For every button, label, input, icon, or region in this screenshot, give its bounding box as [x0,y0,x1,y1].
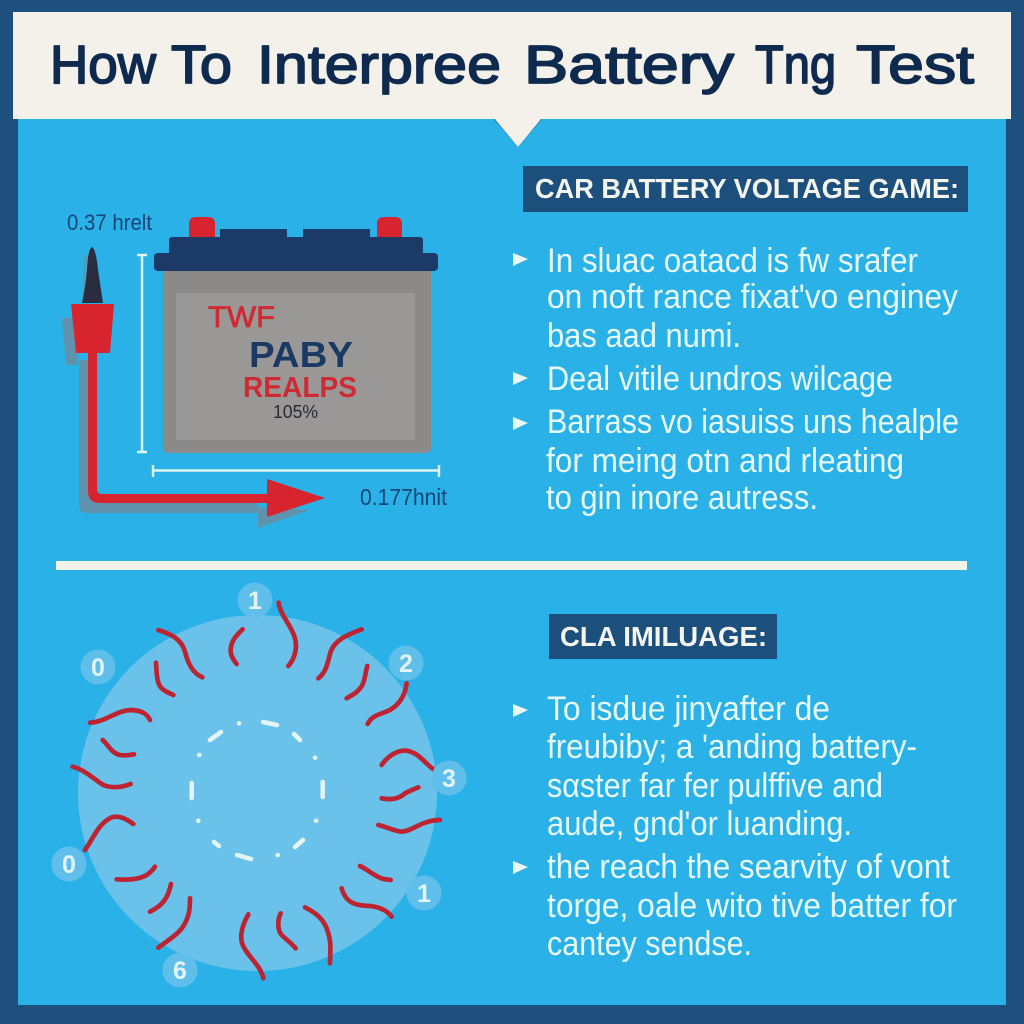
light disc [78,615,437,971]
voltage label bottom: 0.177hnit [360,484,448,510]
probe collar [71,304,114,353]
red squiggles [73,603,440,978]
title text: How [50,35,157,95]
number badges: 3 [442,765,456,793]
heading bar: voltage [523,166,968,212]
battery diagram [62,210,448,528]
number badges: 6 [173,957,187,985]
title text [50,35,974,95]
number badges: 0 [62,851,76,879]
number badges: 0 [91,654,105,682]
bullet 5 [513,848,957,963]
bullet 1: In sluac oatacd is fw srafer [547,242,918,280]
voltage label top: 0.37 hrelt [67,210,152,235]
bullet 4: To isdue jinyafter de [547,690,830,728]
battery lid [154,229,438,271]
battery labels: 105% [273,402,318,422]
bullet 5: torge, oale wito tive batter for [547,887,957,925]
bullet 3 [513,403,959,517]
number badges [52,582,466,988]
battery labels: REALPS [243,372,357,404]
battery body [163,271,431,453]
bullet 4: freubiby; a 'anding battery- [547,728,917,766]
bullet 3: for meing otn and rleating [546,442,904,480]
number badges: 1 [417,880,431,908]
bullet 1 [513,242,958,355]
bullet 3: to gin inore autress. [546,479,818,517]
terminals [189,217,402,238]
title text: Battery [524,35,734,95]
title text: To [171,35,232,95]
wire and arrowhead [88,352,325,517]
divider [56,561,967,570]
bullet 1: bas aad numi. [547,317,741,355]
bullet 5: cantey sendse. [547,925,752,963]
bullet list: voltage [513,242,959,517]
bullet 3: Barrass vo iasuiss uns healple [547,403,959,441]
bullet 4 [513,690,917,843]
number badges: 2 [399,650,413,678]
dashed ring [192,722,323,859]
arrow shadow [62,255,310,528]
title text: Tng [755,35,836,95]
probe arrow [62,247,325,528]
battery label panel [176,293,415,440]
circle diagram [52,582,466,988]
battery labels [208,301,357,422]
bullet list: cla [513,690,957,963]
heading bar: cla: CLA IMILUAGE: [560,621,767,652]
bullet 5: the reach the searvity of vont [547,848,951,886]
heading bar: voltage: CAR BATTERY VOLTAGE GAME: [535,173,959,204]
battery labels: TWF [208,301,275,334]
bullet 2: Deal vitile undros wilcage [547,360,893,398]
number badges: 1 [248,587,262,615]
title text: Test [856,35,974,95]
battery labels: PABY [249,334,353,375]
probe tip [82,247,103,303]
heading bar: cla [549,614,777,659]
dimension lines [137,255,439,477]
title text: Interpree [257,35,501,95]
bullet 1: on noft rance fixat'vo enginey [547,278,958,316]
bullet 4: aude, gnd'or luanding. [547,805,852,843]
title banner [13,12,1011,147]
bullet 4: sαster far fer pulffive and [547,767,883,805]
